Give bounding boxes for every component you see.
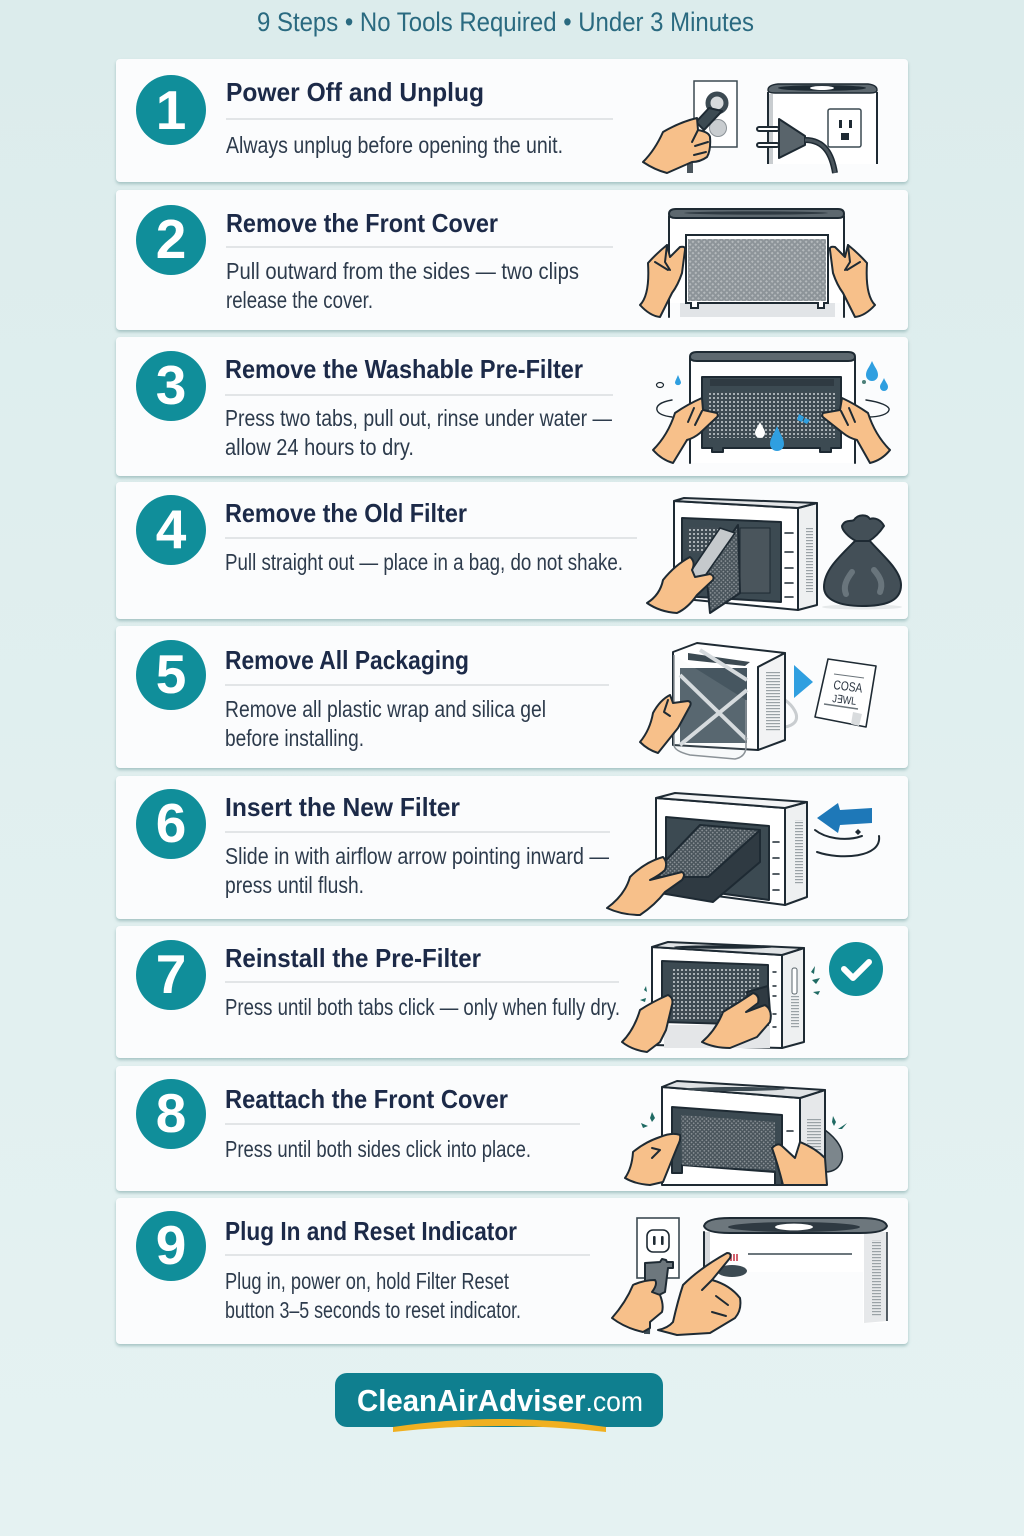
step 7 heading: Reinstall the Pre-Filter [225, 943, 481, 973]
step 8 description: Press until both sides click into place. [225, 1136, 531, 1162]
panel: step 7 [116, 926, 908, 1058]
icon: hand unplugging and plug [643, 81, 877, 173]
icon: removing plastic wrap and silica gel packet: J∃WL [832, 693, 857, 708]
step 5 heading: Remove All Packaging [225, 645, 469, 675]
step 2 description: release the cover. [226, 287, 373, 313]
step 5 description: before installing. [225, 725, 364, 751]
step 1 heading: Power Off and Unplug [226, 77, 484, 107]
step 2 description [226, 258, 579, 313]
step 3 description: Press two tabs, pull out, rinse under water — [225, 405, 612, 431]
step 2 number: 2 [156, 208, 186, 270]
step 5 number [136, 640, 206, 710]
icon: inserting new filter with blue arrow [607, 793, 879, 915]
step 4 number [136, 495, 206, 565]
logo badge [335, 1373, 663, 1432]
step 9 description [225, 1268, 521, 1323]
step 9 description: Plug in, power on, hold Filter Reset [225, 1268, 509, 1294]
icon: removing plastic wrap and silica gel packet [640, 643, 876, 759]
panel: step 4 [116, 482, 908, 619]
step 6 description [225, 843, 609, 898]
step 7 description: Press until both tabs click — only when fully dry. [225, 994, 620, 1020]
step 4 number: 4 [156, 498, 187, 560]
icon: hands removing front cover [640, 209, 875, 317]
step 8 number [136, 1079, 206, 1149]
step 1 description: Always unplug before opening the unit. [226, 132, 563, 158]
step 4 heading: Remove the Old Filter [225, 498, 467, 528]
step 3 heading: Remove the Washable Pre-Filter [225, 354, 583, 384]
step 2 number [136, 205, 206, 275]
step 3 description: allow 24 hours to dry. [225, 434, 414, 460]
panel: step 8 [116, 1066, 908, 1191]
step 9 number [136, 1211, 206, 1281]
logo text: CleanAirAdviser.com [357, 1383, 643, 1418]
step 6 number [136, 789, 206, 859]
step 6 heading: Insert the New Filter [225, 792, 460, 822]
step 6 description: press until flush. [225, 872, 364, 898]
step 5 number: 5 [156, 643, 186, 705]
panel: step 9 [116, 1198, 908, 1344]
icon: reattaching front cover [625, 1081, 847, 1185]
subtitle: 9 Steps • No Tools Required • Under 3 Minutes [257, 7, 754, 37]
step 9 heading: Plug In and Reset Indicator [225, 1216, 517, 1246]
step 3 number: 3 [156, 354, 186, 416]
step 4 description: Pull straight out — place in a bag, do not shake. [225, 549, 623, 575]
step 9 number: 9 [156, 1214, 186, 1276]
icon: reinstalling pre-filter with check mark [622, 942, 883, 1052]
step 3 description [225, 405, 612, 460]
icon: plugging in and pressing reset button [612, 1218, 887, 1335]
step 5 description [225, 696, 546, 751]
step 6 description: Slide in with airflow arrow pointing inward — [225, 843, 609, 869]
step 8 heading: Reattach the Front Cover [225, 1084, 508, 1114]
step 6 number: 6 [156, 792, 186, 854]
step 5 description: Remove all plastic wrap and silica gel [225, 696, 546, 722]
logo underline swoosh [393, 1419, 606, 1432]
panel: step 5 [116, 626, 908, 768]
panel: step 2 [116, 190, 908, 330]
icon: pulling old filter and trash bag [647, 498, 902, 613]
step 9 description: button 3–5 seconds to reset indicator. [225, 1297, 521, 1323]
step 2 description: Pull outward from the sides — two clips [226, 258, 579, 284]
icon: hands rinsing pre-filter with water drops [653, 352, 890, 463]
step 7 number [136, 940, 206, 1010]
panel: step 3 [116, 337, 908, 476]
step 3 number [136, 351, 206, 421]
step 8 number: 8 [156, 1082, 186, 1144]
step 1 number: 1 [156, 79, 186, 141]
icon: removing plastic wrap and silica gel packet: COSA [833, 677, 864, 696]
step 1 number [136, 75, 206, 145]
step 2 heading: Remove the Front Cover [226, 208, 498, 238]
step 7 number: 7 [156, 943, 186, 1005]
panel: step 1 [116, 59, 908, 182]
panel: step 6 [116, 776, 908, 919]
